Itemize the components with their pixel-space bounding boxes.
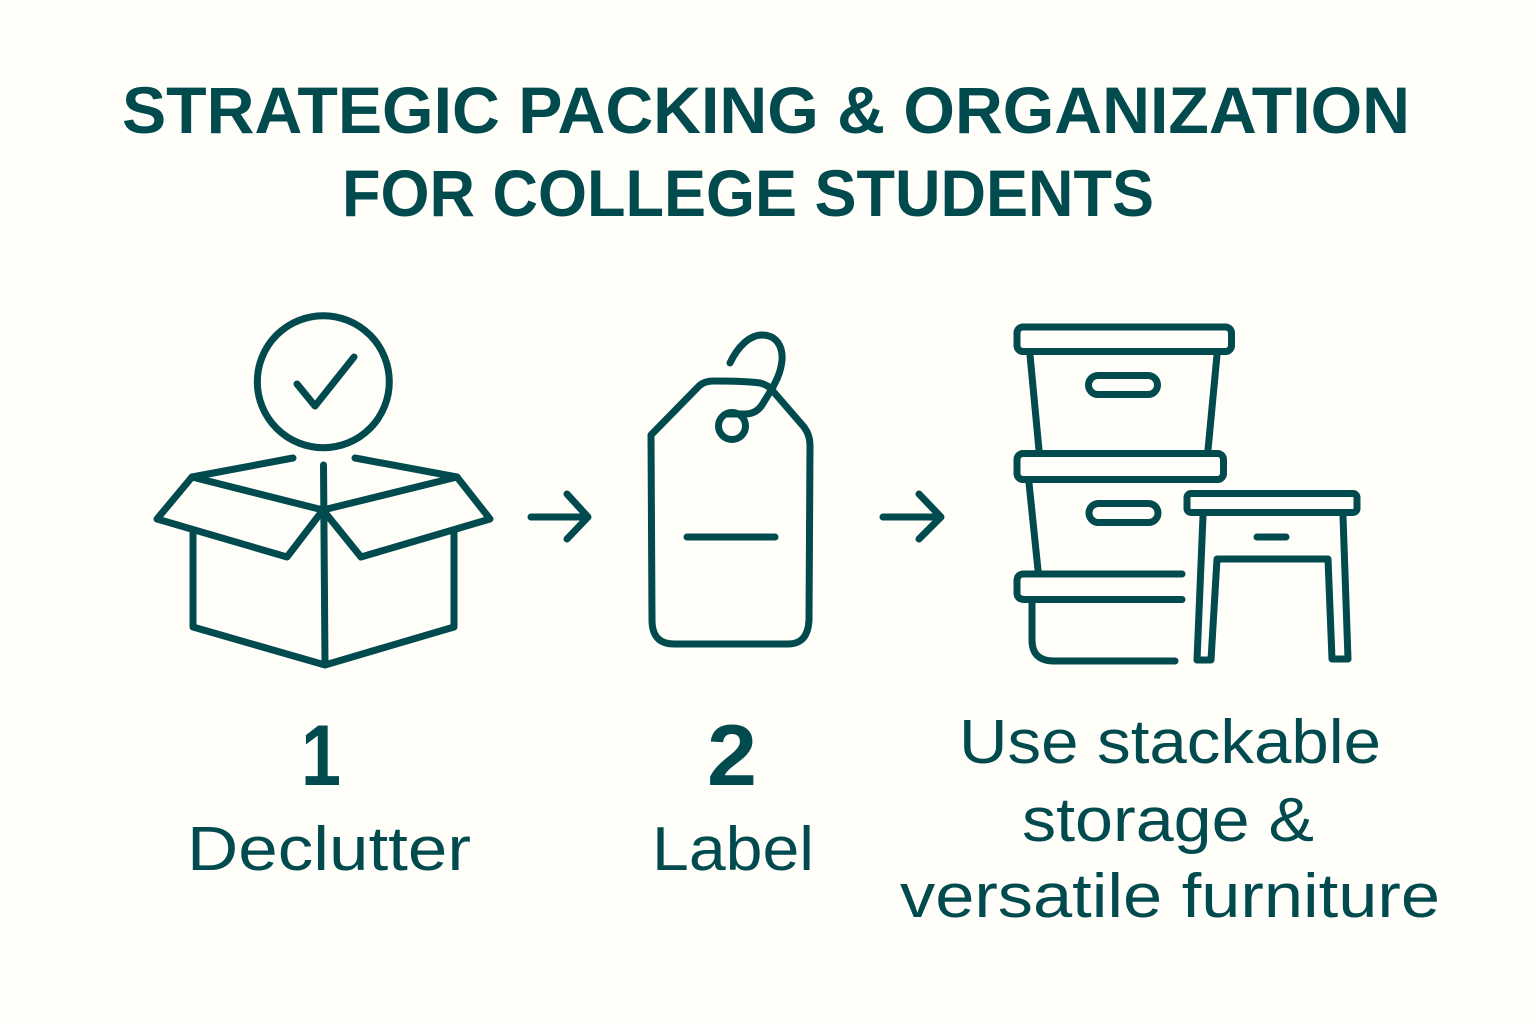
title: FOR COLLEGE STUDENTS (342, 156, 1154, 230)
step 3 description: Use stackable (959, 708, 1381, 777)
arrow: label to storage (883, 494, 941, 539)
step 3 description: versatile furniture (900, 862, 1440, 931)
step 1 label: Declutter (187, 815, 471, 884)
step 2 label: Label (652, 815, 814, 884)
step 3 description (900, 708, 1440, 931)
title (122, 73, 1410, 230)
icon: label tag (651, 335, 810, 644)
arrow: declutter to label (531, 494, 588, 539)
step 3 description: storage & (1022, 786, 1314, 855)
icon: stackable storage and stool (1017, 327, 1357, 661)
title: STRATEGIC PACKING & ORGANIZATION (122, 73, 1410, 147)
icon: open box with check mark (157, 316, 490, 665)
step 1 number: 1 (301, 708, 341, 804)
step 2 number: 2 (707, 708, 757, 804)
